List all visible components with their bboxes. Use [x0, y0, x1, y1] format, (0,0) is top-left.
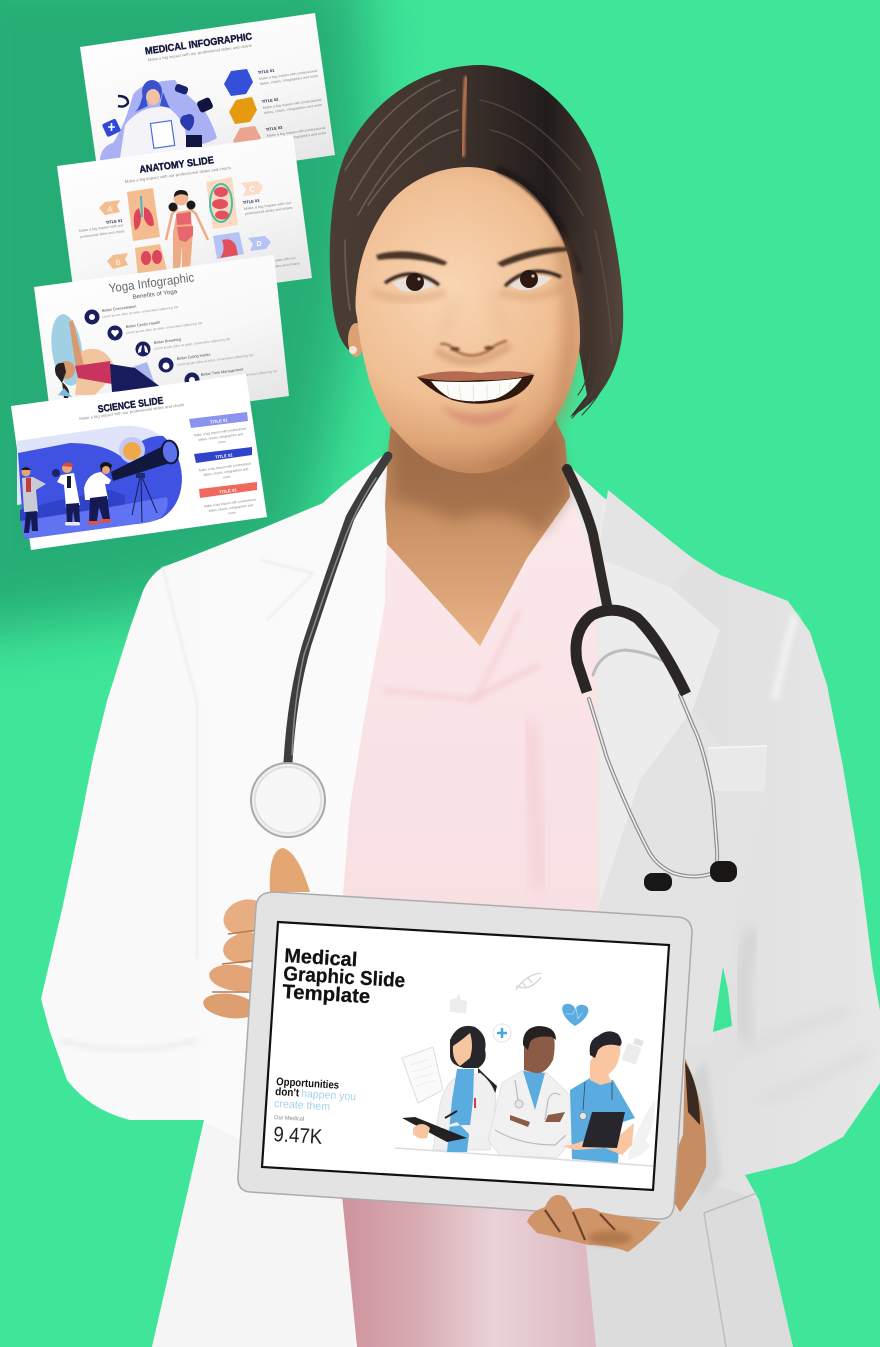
lapel left — [300, 470, 385, 893]
card: intestines — [206, 177, 238, 229]
text: title 01 description: more — [218, 439, 226, 444]
face — [356, 167, 580, 473]
slide text items: Make a big impact with professional — [267, 126, 326, 138]
slide subtitle: Make a big impact with our professional slides and charts — [124, 165, 231, 184]
slide title: anatomy slide: ANATOMY SLIDE — [139, 155, 215, 176]
scrub top — [343, 497, 598, 1000]
illustration: floor line — [395, 1148, 653, 1166]
icon: dna — [516, 973, 541, 990]
benefit: better breathing: Better Breathing — [154, 337, 181, 345]
slide title: science slide: SCIENCE SLIDE — [97, 396, 164, 415]
nose — [441, 341, 506, 356]
benefit: better concentration: Better Concentration — [102, 304, 137, 313]
panel: medical infographic slide — [80, 13, 335, 189]
ear and earring — [348, 323, 364, 357]
coat shading and folds — [60, 560, 870, 1347]
benefit: better concentration — [84, 304, 179, 324]
screen tagline — [274, 1076, 356, 1113]
slide text items: Make a big impact with professional — [263, 98, 322, 110]
eyebrows — [376, 247, 568, 267]
slide text items: Make a big impact with our — [79, 223, 125, 233]
black yoke — [576, 610, 686, 694]
panel: anatomy slide — [57, 135, 312, 310]
screen tagline: Opportunities — [276, 1076, 339, 1092]
text: title 03 description: slides, charts, infographics and — [208, 503, 254, 513]
slide text items: slides, charts, infographics and more — [268, 131, 327, 143]
slide text items: impact with our — [272, 256, 297, 263]
illustration: girl figure — [166, 190, 208, 270]
illustration: doctor with medical icons — [100, 80, 217, 165]
screen tagline: happen you — [301, 1088, 356, 1103]
illustration: scientists with telescope — [17, 426, 182, 539]
button: title 01: TITLE 01 — [210, 417, 229, 425]
neck shadow — [392, 425, 570, 535]
screen stat value: 9.47K — [273, 1123, 323, 1149]
illustration: nurse in blue scrubs — [562, 1031, 635, 1163]
right sleeve cuff shadow — [690, 1060, 722, 1200]
stethoscope — [251, 456, 737, 891]
collar flap right — [598, 490, 695, 587]
text: title 03 description — [204, 497, 256, 515]
text: title 03 description: Make a big impact with professional — [204, 497, 256, 509]
tag A: A — [107, 205, 113, 214]
eyes — [385, 270, 561, 292]
benefit: better cardio health: Lorem ipsum dolor sit amet, consectetur adipiscing elit. — [126, 321, 203, 335]
hair back — [330, 65, 623, 417]
text: title 02 description: Make a big impact with professional — [199, 461, 251, 473]
text: title 01 description — [194, 426, 246, 444]
breast pocket — [708, 746, 767, 791]
benefit: better breathing — [136, 337, 231, 356]
screen heading — [282, 945, 406, 1008]
shadow behind slides — [0, 0, 375, 640]
card: lungs — [127, 188, 160, 241]
lower coat left panel — [152, 1122, 355, 1347]
neck — [385, 415, 570, 646]
benefit: better time management — [184, 367, 278, 388]
metal binaural — [589, 650, 717, 876]
text: title 01 description: Make a big impact with professional — [194, 426, 246, 438]
slide text items — [79, 198, 300, 269]
right thumb — [666, 1058, 706, 1212]
icon: plus — [493, 1024, 511, 1042]
tag D — [248, 236, 271, 251]
screen tagline: don't — [275, 1086, 300, 1099]
screen heading: Medical — [284, 945, 358, 971]
left thumb — [270, 848, 310, 892]
benefit: better cardio health — [108, 321, 203, 340]
left hand fingers — [202, 894, 271, 1022]
slide text items: Make a big impact with professional — [259, 69, 318, 81]
button: title 03 — [199, 482, 257, 498]
benefit: better breathing: Lorem ipsum dolor sit amet, consectetur adipiscing elit. — [154, 337, 231, 351]
icon: clipboard — [402, 1047, 443, 1103]
text: title 02 description — [199, 461, 251, 479]
benefit: better time management: Lorem ipsum dolor sit amet, consectetur adipiscing elit. — [201, 369, 278, 383]
card: kidneys — [135, 244, 167, 277]
hexagon: title 03 — [233, 126, 261, 152]
left tube — [288, 456, 388, 762]
coat front right panel — [598, 709, 767, 1045]
screen stat label: Our Medical — [274, 1115, 304, 1123]
gap between coat and arm — [713, 967, 732, 1032]
benefit: better eating habits — [158, 353, 254, 372]
slide text items: TITLE 01 — [105, 218, 123, 225]
benefit: better eating habits: Lorem ipsum dolor sit amet, consectetur adipiscing elit. — [177, 353, 254, 367]
hexagon: title 01 — [224, 69, 253, 96]
slide subtitle: Make a big impact with our professional slides and charts — [147, 43, 252, 62]
tag B — [107, 253, 128, 269]
slide title: medical infographic: MEDICAL INFOGRAPHIC — [144, 32, 253, 57]
button: title 01 — [189, 412, 248, 428]
tag C — [241, 181, 263, 196]
slide text items: slides, charts, infographics and more — [260, 74, 319, 86]
slide text items: TITLE 02 — [261, 97, 279, 104]
left tube highlight — [292, 478, 376, 755]
panel: science slide — [11, 374, 267, 550]
slide subtitle: benefits of yoga: Benefits of Yoga — [132, 289, 178, 301]
benefit: better eating habits: Better Eating Habits — [177, 353, 211, 361]
icon: plant leaves — [628, 1100, 655, 1160]
right tube — [567, 469, 607, 605]
button: title 02 — [194, 447, 252, 463]
lower coat right panel — [582, 1180, 793, 1347]
tablet body — [238, 892, 692, 1219]
slide text items: TITLE 03 — [242, 198, 260, 205]
ear tip left — [644, 873, 672, 891]
text: title 02 description: more — [223, 474, 231, 479]
tag A — [99, 200, 120, 215]
illustration: female doctor — [402, 1026, 497, 1152]
illustration: yoga pose — [47, 312, 162, 398]
slide title: yoga infographic: Yoga Infographic — [108, 270, 195, 296]
screen heading: Template — [282, 981, 371, 1008]
ear tip right — [710, 861, 737, 882]
button: title 02: TITLE 02 — [215, 452, 234, 460]
tag C: C — [249, 185, 255, 194]
hair details — [345, 78, 620, 418]
slide text items: Make a big impact with our — [244, 201, 293, 211]
tag D: D — [256, 241, 262, 248]
slide text items — [257, 68, 327, 143]
slide text items: TITLE 01 — [257, 68, 275, 75]
scrub lower panel — [342, 1195, 596, 1347]
tablet — [238, 892, 692, 1219]
text: title 01 description: slides, charts, infographics and — [198, 432, 244, 442]
white coat silhouette — [41, 452, 880, 1347]
right hand under tablet — [527, 1195, 661, 1252]
smile — [416, 371, 535, 426]
card: stomach — [213, 232, 244, 259]
coat lapel right — [598, 500, 720, 900]
illustration: male doctor — [488, 1026, 572, 1158]
face shading — [372, 240, 570, 470]
screen heading: Graphic Slide — [283, 963, 406, 992]
scrub folds — [383, 610, 540, 890]
button: title 03: TITLE 03 — [219, 487, 238, 495]
text: title 03 description: more — [228, 510, 236, 515]
hexagon: title 02 — [229, 97, 257, 124]
screen tagline: create them — [274, 1098, 330, 1113]
slide text items: slides, charts, infographics and more — [264, 103, 323, 115]
text: title 02 description: slides, charts, infographics and — [203, 467, 249, 477]
slide text items: professional slides and charts — [245, 206, 293, 216]
benefit: better cardio health: Better Cardio Health — [126, 321, 160, 329]
slide subtitle: Make a big impact with our professional slides and charts — [79, 402, 185, 421]
slide text items: professional slides and charts — [80, 229, 125, 239]
panel: yoga infographic slide — [34, 255, 289, 428]
slide text items: TITLE 03 — [265, 125, 283, 132]
icon: pill bottle — [621, 1038, 644, 1065]
benefit: better concentration: Lorem ipsum dolor sit amet, consectetur adipiscing elit. — [102, 305, 179, 319]
icon: heart — [562, 1004, 588, 1026]
tablet screen — [262, 922, 669, 1190]
benefit: better time management: Better Time Management — [201, 367, 244, 377]
chest piece — [251, 763, 325, 837]
icon: thumbs up — [450, 994, 467, 1013]
slide text items: slides and charts — [272, 261, 300, 269]
tag B: B — [115, 260, 121, 267]
